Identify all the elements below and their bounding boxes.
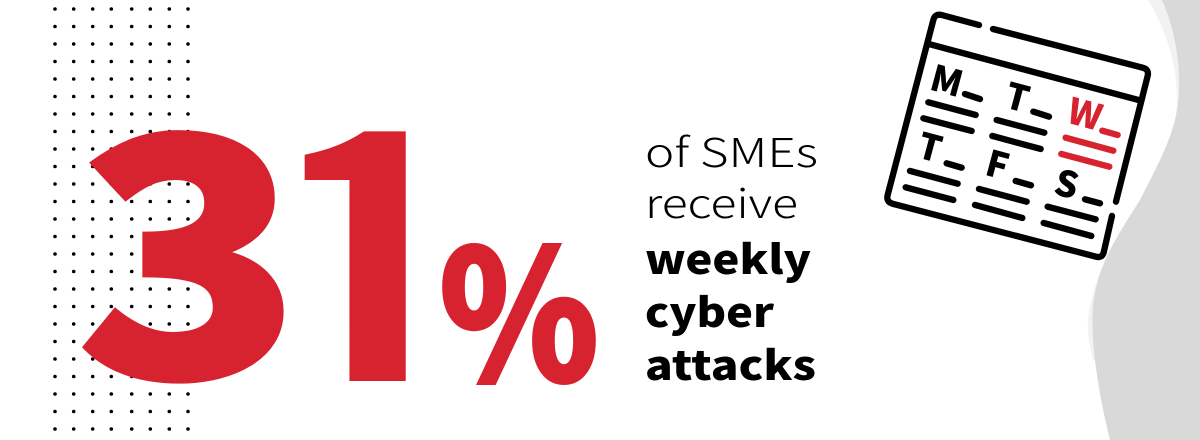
day letters — [913, 50, 1109, 210]
black entry lines — [906, 94, 1100, 236]
letter S: S — [1049, 154, 1085, 210]
caption line: of SMEs: of SMEs — [645, 121, 818, 179]
caption line: attacks: attacks — [645, 334, 816, 392]
dot grid — [53, 7, 190, 431]
caption text — [645, 121, 818, 392]
letter T: T — [913, 117, 948, 174]
letter F: F — [981, 135, 1015, 191]
red entry lines — [1061, 131, 1118, 167]
letter M: M — [925, 50, 969, 108]
letter W: W — [1063, 83, 1109, 142]
background wave: light layer — [1088, 0, 1200, 360]
caption line: weekly: weekly — [645, 228, 811, 286]
calendar frame — [887, 15, 1148, 257]
calendar header line — [930, 44, 1138, 100]
percent sign: % — [439, 172, 599, 433]
icon: tilted calendar — [887, 15, 1148, 257]
background wave: grey layer — [1092, 0, 1200, 440]
letter T: T — [1000, 67, 1036, 124]
caption line: receive: receive — [645, 172, 798, 230]
caption line: cyber: cyber — [645, 281, 774, 339]
